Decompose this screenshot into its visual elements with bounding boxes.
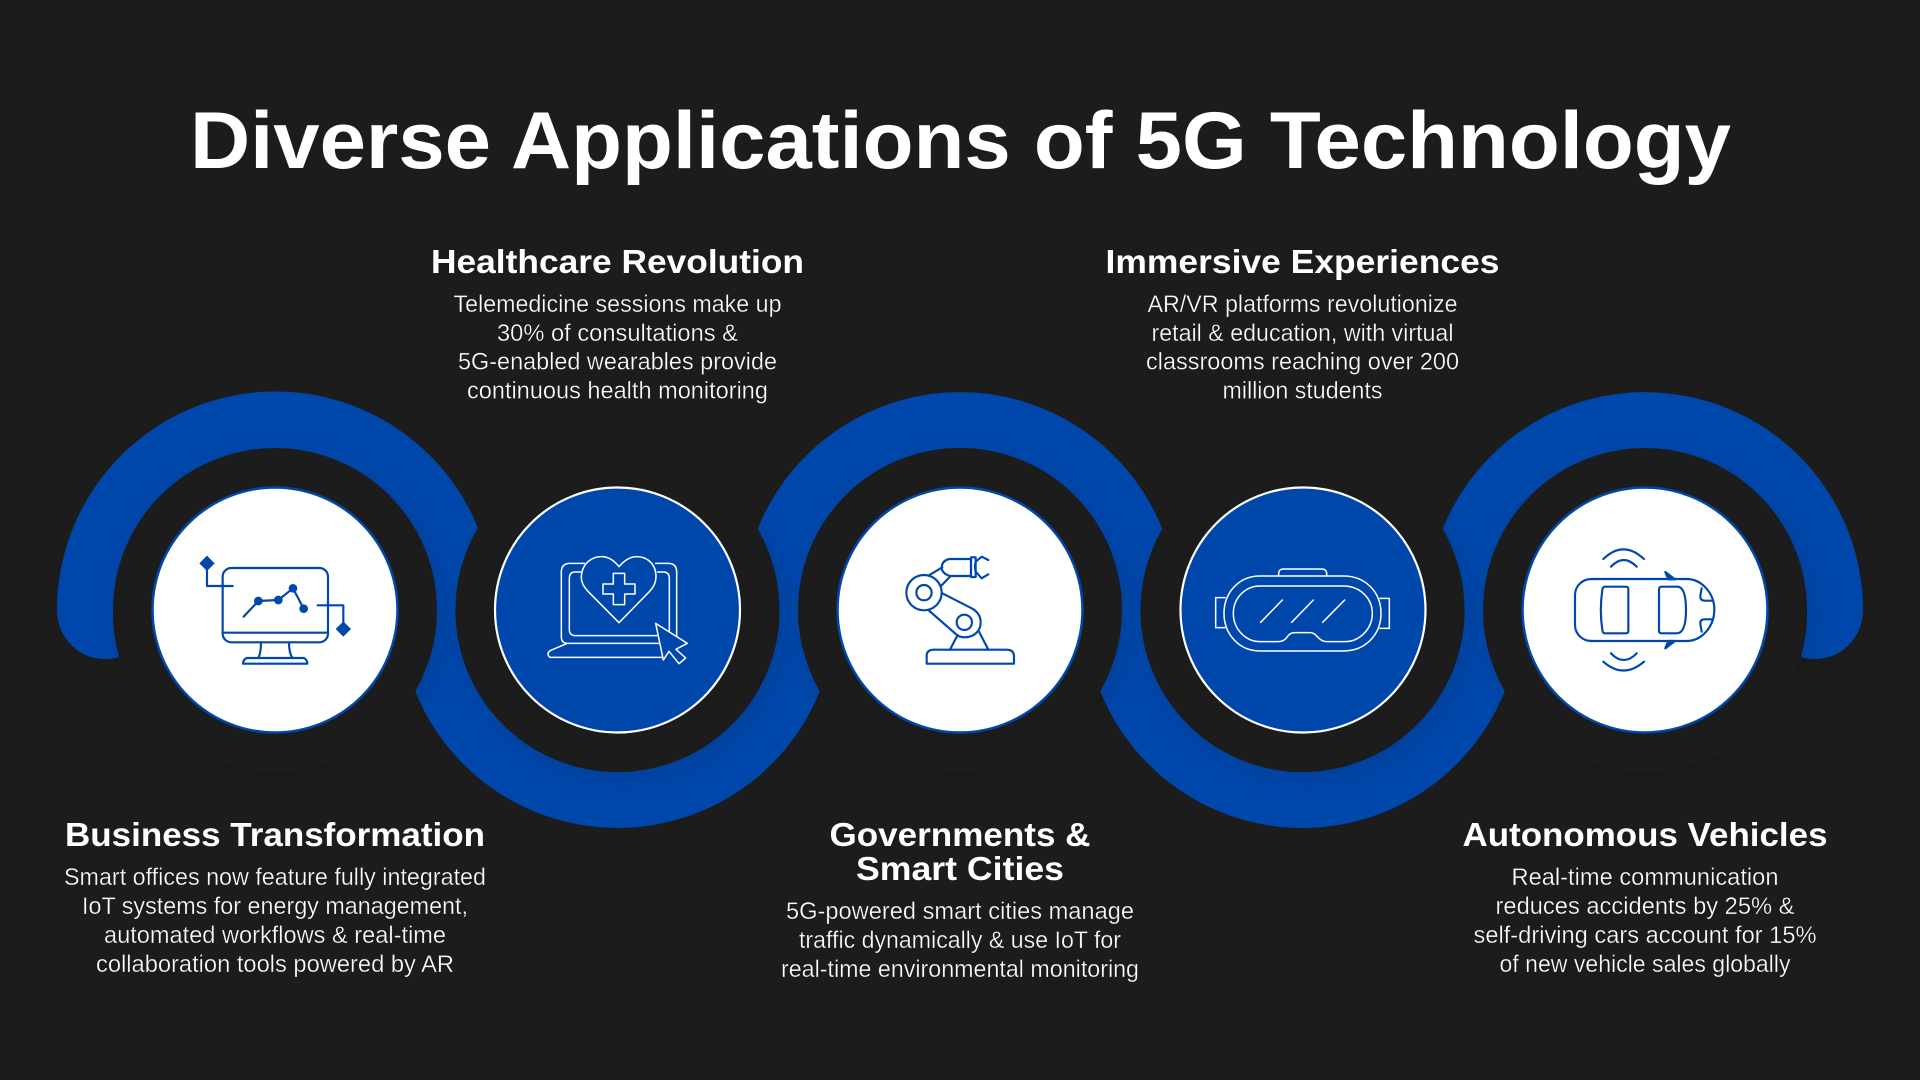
title: Diverse Applications of 5G Technology [190,96,1731,186]
description [454,291,782,404]
description: AR/VR platforms revolutionize [1148,291,1458,318]
heading: Autonomous Vehicles [1462,817,1828,854]
heading: Healthcare Revolution [431,244,804,281]
text block: Autonomous Vehicles [1462,817,1828,978]
description [781,898,1139,983]
description: continuous health monitoring [467,378,768,404]
description: Telemedicine sessions make up [454,291,782,318]
heading: Business Transformation [65,817,485,854]
description: Real-time communication [1512,864,1778,891]
text block: Immersive Experiences [1106,244,1500,404]
description: traffic dynamically & use IoT for [799,927,1121,954]
icon: monitor with chart [199,556,351,664]
description: collaboration tools powered by AR [96,951,454,978]
description: retail & education, with virtual [1152,320,1454,347]
description: real-time environmental monitoring [781,956,1139,983]
icon: laptop with heart [548,557,687,664]
description: reduces accidents by 25% & [1496,893,1794,920]
description: 30% of consultations & [497,320,738,347]
text block: Governments & Smart Cities [781,817,1139,983]
heading: Smart Cities [856,851,1064,888]
description: 5G-powered smart cities manage [786,898,1134,925]
circle: immersive [1180,488,1426,732]
circle: healthcare [495,488,740,732]
icon: autonomous car [1575,549,1714,670]
text block: Healthcare Revolution [431,244,804,404]
heading: Governments & [830,817,1090,854]
description: automated workflows & real-time [104,922,446,949]
heading: Immersive Experiences [1106,244,1500,281]
dark discs behind icons [113,448,1807,772]
description [64,864,486,978]
description: million students [1222,378,1382,404]
circle: vehicles [1522,488,1768,732]
description [1474,864,1816,978]
serpentine blue ribbon [57,391,1863,828]
text block: Business Transformation [64,817,486,978]
circle: business [152,488,398,732]
description: of new vehicle sales globally [1500,951,1791,978]
description: 5G-enabled wearables provide [458,348,777,376]
description: classrooms reaching over 200 [1146,348,1459,376]
icon: VR headset [1216,569,1389,651]
description [1146,291,1459,404]
description: IoT systems for energy management, [82,893,468,920]
icon: robotic arm [906,557,1014,664]
description: Smart offices now feature fully integrated [64,864,486,891]
circle: smart cities [838,488,1082,732]
description: self-driving cars account for 15% [1474,922,1816,949]
